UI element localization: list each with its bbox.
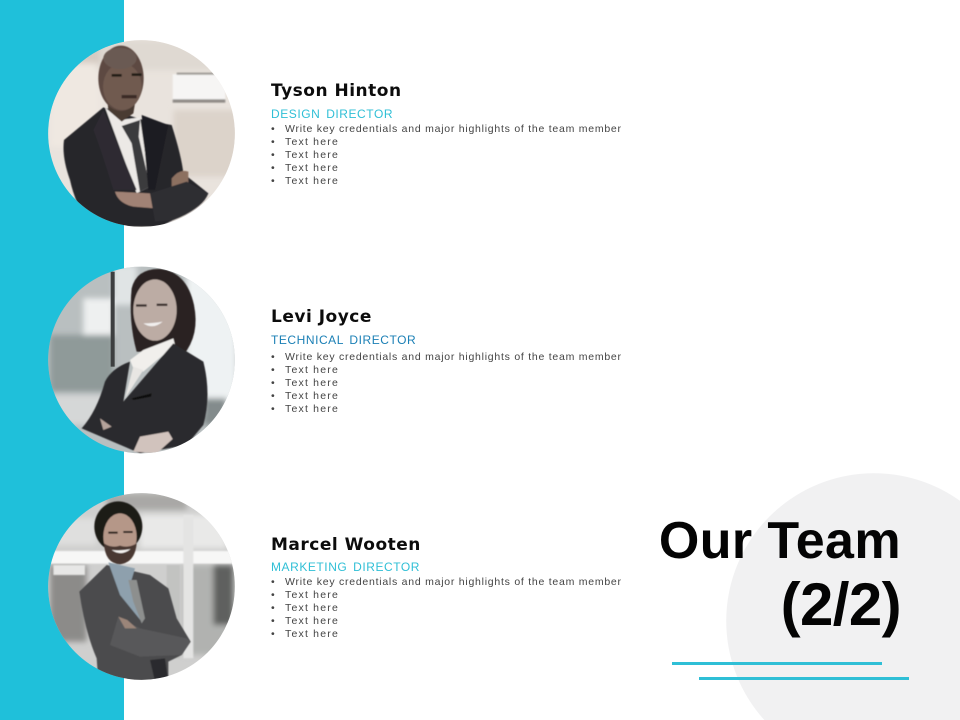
title: (2/2) [781,571,901,638]
title: Our Team [659,512,901,570]
member: Tyson Hinton [271,81,622,187]
accent line bottom [699,677,909,680]
credentials list: Text here [285,390,339,402]
name: Tyson Hinton [271,81,402,101]
name: Marcel Wooten [271,535,421,555]
credentials list [271,576,622,640]
credentials list: Text here [285,377,339,389]
portrait: Levi Joyce [48,266,235,454]
credentials list: Text here [285,602,339,614]
role: MARKETING DIRECTOR [271,560,420,574]
credentials list: Text here [285,364,339,376]
credentials list: Text here [285,615,339,627]
credentials list: Text here [285,149,339,161]
title [659,512,901,638]
credentials list: Text here [285,589,339,601]
portrait: Tyson Hinton [48,40,235,227]
credentials list: Text here [285,175,339,187]
member: Levi Joyce [271,307,622,415]
cyan side band [0,0,124,720]
portrait: Marcel Wooten [48,493,235,680]
credentials list: Text here [285,162,339,174]
credentials list: Write key credentials and major highlights of the team member [285,576,622,588]
name: Levi Joyce [271,307,372,327]
credentials list: Write key credentials and major highlights of the team member [285,123,622,135]
credentials list: Text here [285,403,339,415]
credentials list [271,351,622,415]
credentials list: Write key credentials and major highlights of the team member [285,351,622,363]
member: Marcel Wooten [271,535,622,640]
background grey circle [726,473,960,720]
accent line top [672,662,882,665]
portraits [48,40,235,680]
role: TECHNICAL DIRECTOR [271,333,416,347]
role: DESIGN DIRECTOR [271,107,393,121]
credentials list: Text here [285,136,339,148]
credentials list [271,123,622,187]
credentials list: Text here [285,628,339,640]
